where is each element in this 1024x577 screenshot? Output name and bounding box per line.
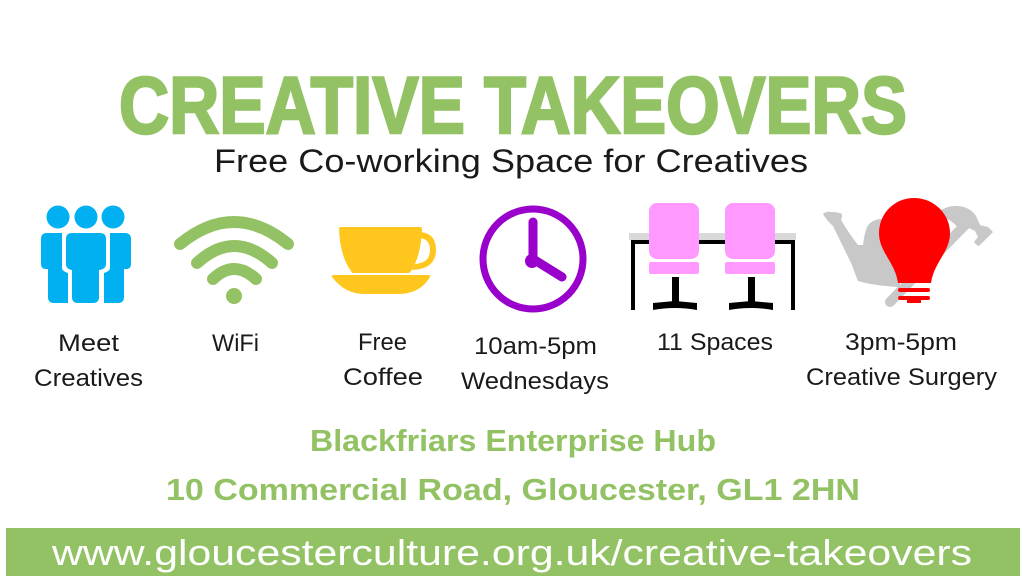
- label: meet creatives: [34, 330, 143, 392]
- url banner: www.gloucesterculture.org.uk/creative-takeovers: [51, 532, 972, 573]
- label: creative surgery: Creative Surgery: [806, 364, 997, 391]
- label: opening hours: [461, 333, 609, 395]
- label: meet creatives: Creatives: [34, 365, 143, 392]
- title: TAKEOVERS: [484, 61, 907, 151]
- address: Blackfriars Enterprise Hub: [310, 423, 716, 458]
- label: creative surgery: [806, 329, 997, 391]
- icon: wifi: [180, 222, 288, 304]
- label: opening hours: Wednesdays: [461, 368, 609, 395]
- icon: coffee cup: [332, 227, 436, 294]
- icon: desk and chairs: [629, 203, 796, 310]
- label: meet creatives: Meet: [58, 330, 119, 357]
- address: [166, 423, 860, 507]
- label: free coffee: Free: [358, 329, 407, 356]
- address: 10 Commercial Road, Gloucester, GL1 2HN: [166, 472, 860, 507]
- icon: tools and light bulb: [823, 198, 993, 303]
- label: wifi: WiFi: [212, 330, 259, 357]
- icon: clock: [483, 209, 583, 309]
- label: spaces: 11 Spaces: [657, 329, 773, 356]
- label: free coffee: Coffee: [343, 364, 423, 391]
- title: CREATIVE: [119, 61, 465, 151]
- label: free coffee: [343, 329, 423, 391]
- subtitle: Free Co-working Space for Creatives: [214, 143, 808, 179]
- label: creative surgery: 3pm-5pm: [845, 329, 957, 356]
- title: [119, 61, 907, 151]
- url banner: [6, 528, 1020, 576]
- icon: people: [41, 206, 131, 303]
- label: opening hours: 10am-5pm: [474, 333, 597, 360]
